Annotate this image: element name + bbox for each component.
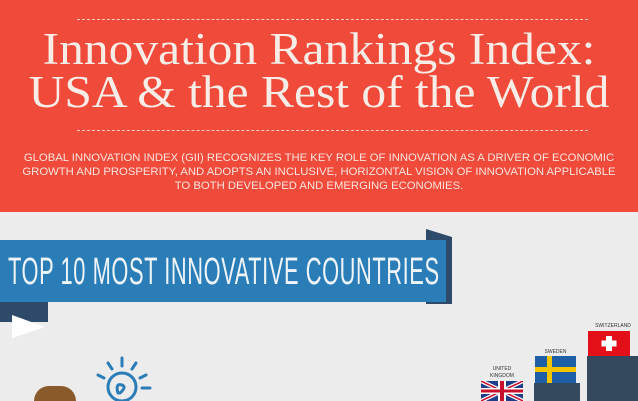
pillar Sweden	[534, 383, 580, 401]
label UK	[490, 366, 514, 379]
title	[29, 24, 609, 117]
title: Innovation Rankings Index:	[43, 24, 595, 74]
icon: person	[34, 386, 76, 401]
banner: top 10	[0, 229, 452, 338]
podium chart	[481, 323, 638, 401]
title: USA & the Rest of the World	[29, 67, 609, 117]
flag Switzerland	[588, 331, 630, 356]
icon: light bulb	[96, 356, 152, 401]
flag UK	[481, 381, 523, 401]
intro text: TO BOTH DEVELOPED AND EMERGING ECONOMIES.	[175, 180, 463, 192]
label UK: UNITED	[493, 366, 511, 372]
label Sweden: SWEDEN	[545, 349, 566, 355]
top dotted divider	[77, 19, 588, 20]
label UK: KINGDOM	[490, 373, 514, 379]
intro text: GROWTH AND PROSPERITY, AND ADOPTS AN INCLUSIVE, HORIZONTAL VISION OF INNOVATION APPLICABLE	[22, 166, 616, 178]
header panel	[0, 0, 638, 212]
intro text: GLOBAL INNOVATION INDEX (GII) RECOGNIZES THE KEY ROLE OF INNOVATION AS A DRIVER OF ECONOMIC	[24, 152, 614, 164]
banner text: TOP 10 MOST INNOVATIVE COUNTRIES	[8, 251, 440, 293]
intro text	[22, 152, 616, 192]
bottom dotted divider	[77, 130, 588, 131]
label Switzerland: SWITZERLAND	[595, 323, 631, 329]
pillar Switzerland	[587, 356, 638, 401]
flag Sweden	[535, 356, 576, 383]
